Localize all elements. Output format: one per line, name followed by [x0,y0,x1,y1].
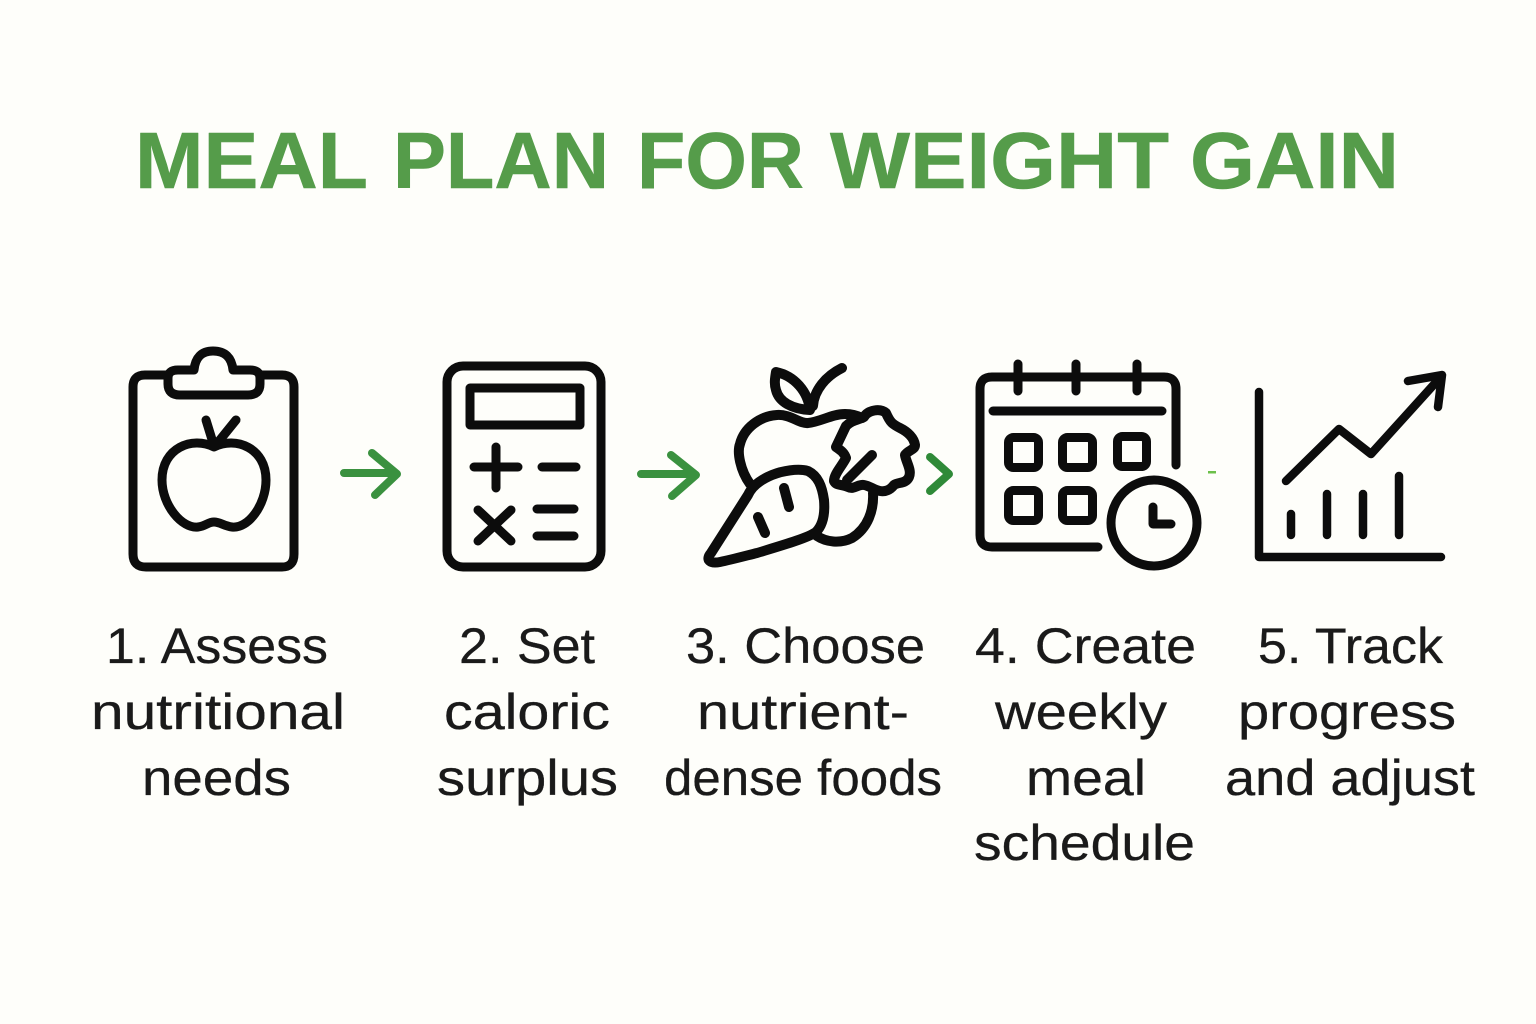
arrow 1 [344,453,397,495]
step 5 label: 5. Track [1258,618,1444,674]
step 5 label: progress [1238,684,1456,740]
icon: calendar with clock [980,364,1197,566]
step 2 label [437,618,618,806]
step 5 label: and adjust [1225,750,1475,806]
step 1 label: needs [142,750,291,806]
step 2 label: surplus [437,750,618,806]
step 1 label: 1. Assess [106,618,328,674]
arrow 2 [641,455,696,496]
step 5 label [1225,618,1475,806]
step 2 label: caloric [444,684,610,740]
arrow 3 [930,457,949,491]
title: FOR [637,116,804,205]
step 3 label: 3. Choose [686,618,925,674]
step 4 label [974,618,1196,871]
step 4 label: meal [1026,750,1146,806]
title: PLAN [393,116,609,205]
step 4 label: weekly [994,684,1167,740]
step 3 label: dense foods [664,750,942,806]
step 2 label: 2. Set [459,618,595,674]
stray green mark (arrow 4) [1208,471,1216,474]
step 1 label: nutritional [91,684,345,740]
icon: clipboard with apple [133,351,294,567]
icon: growth chart [1259,375,1442,557]
title [135,116,1399,205]
step 4 label: 4. Create [975,618,1196,674]
step 4 label: schedule [974,815,1195,871]
title: GAIN [1190,116,1399,205]
icon: calculator [447,366,601,567]
icon: fruit and vegetables [708,368,915,563]
step 3 label [664,618,942,806]
step 1 label [91,618,345,806]
step 3 label: nutrient- [697,684,909,740]
title: MEAL [135,116,368,205]
title: WEIGHT [830,116,1169,205]
